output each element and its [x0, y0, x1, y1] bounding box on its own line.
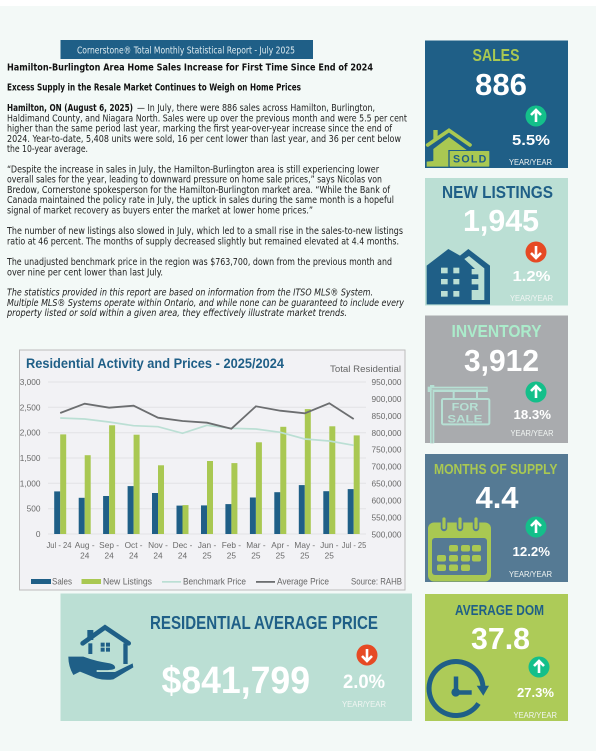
month axis labels: 25	[300, 550, 310, 560]
average price value: $841,799	[162, 660, 310, 702]
icon: up arrow	[528, 656, 550, 678]
legend: Sales	[52, 576, 72, 586]
month axis labels: May -	[294, 540, 315, 550]
year over year label: YEAR/YEAR	[509, 569, 552, 579]
paragraph: spokesperson quote: overall sales for the year, leading to downward pressure on home sale prices,” says Nicolas von	[7, 174, 382, 186]
left axis labels: 2,000	[20, 428, 41, 438]
month axis labels: Feb -	[222, 540, 241, 550]
panel: inventory	[425, 316, 568, 443]
left axis labels: 1,500	[20, 453, 41, 463]
months of supply value: 4.4	[476, 480, 519, 515]
icon: up arrow	[526, 106, 546, 126]
year over year label: YEAR/YEAR	[510, 428, 554, 438]
inventory value: 3,912	[464, 343, 539, 378]
icon: up arrow	[526, 382, 546, 402]
average price line	[60, 403, 354, 429]
right axis labels: 900,000	[372, 394, 402, 404]
sales value: 886	[475, 67, 527, 102]
month axis labels: 24	[104, 550, 114, 560]
right axis labels: 500,000	[372, 529, 402, 539]
month axis labels: 25	[325, 550, 334, 560]
month axis labels: Jul - 24	[46, 540, 72, 550]
panel: new listings	[425, 178, 568, 306]
left axis labels: 1,000	[20, 478, 41, 488]
chart title: Residential Activity and Prices - 2025/2024	[26, 356, 284, 371]
subheading: Excess Supply in the Resale Market Continues to Weigh on Home Prices	[7, 82, 301, 94]
legend	[31, 576, 402, 586]
report banner: Cornerstone® Total Monthly Statistical Report - July 2025	[77, 46, 295, 56]
inventory change: 18.3%	[514, 408, 551, 422]
month axis labels: 24	[178, 550, 187, 560]
legend: New Listings	[103, 576, 152, 586]
new listings value: 1,945	[463, 203, 539, 238]
month axis labels: 25	[251, 550, 261, 560]
average DOM heading: AVERAGE DOM	[455, 603, 544, 619]
month axis labels: 25	[227, 550, 236, 560]
year over year label: YEAR/YEAR	[510, 293, 553, 303]
panel: sales	[425, 40, 568, 168]
month axis labels: Apr -	[271, 540, 290, 550]
icon: sold house: SOLD	[453, 154, 487, 166]
new listings heading: NEW LISTINGS	[442, 182, 553, 202]
paragraph: sales summary: the 10-year average.	[7, 144, 88, 155]
months of supply change: 12.2%	[512, 545, 550, 559]
legend: Average Price	[277, 576, 329, 586]
months of supply heading: MONTHS OF SUPPLY	[434, 462, 558, 478]
left axis labels: 3,000	[20, 377, 41, 387]
right axis labels: 650,000	[372, 479, 402, 489]
month axis labels: 25	[202, 550, 212, 560]
month axis labels: 24	[129, 550, 139, 560]
icon: down arrow	[526, 242, 546, 262]
icon: for sale sign: SALE	[447, 414, 483, 426]
month axis labels	[46, 540, 367, 560]
paragraph: MLS disclaimer: The statistics provided in this report are based on information from the ITSO MLS® System.	[7, 288, 373, 298]
paragraph: spokesperson quote	[7, 164, 394, 216]
right axis labels: 850,000	[372, 411, 402, 421]
right axis labels: 550,000	[372, 512, 402, 522]
legend: Source: RAHB	[351, 576, 402, 586]
new listings bars	[60, 409, 360, 534]
average DOM value: 37.8	[471, 621, 530, 656]
paragraph: benchmark price: over nine per cent lower than last July.	[7, 267, 163, 278]
icon: down arrow	[356, 644, 378, 666]
paragraph: benchmark price: The unadjusted benchmark price in the region was $763,700, down from the previous month and	[6, 257, 392, 268]
sales heading: SALES	[472, 45, 520, 65]
icon: for sale sign	[428, 385, 489, 443]
icon: calendar	[428, 519, 491, 582]
icon: house in hand	[68, 627, 133, 680]
year over year label: YEAR/YEAR	[514, 710, 557, 720]
right axis labels: 600,000	[372, 496, 402, 506]
right axis labels: 700,000	[372, 462, 402, 472]
month axis labels: Sep -	[99, 540, 119, 550]
right axis labels: 750,000	[372, 445, 402, 455]
paragraph: sales summary: Haldimand County, and Niagara North. Sales were up over the previous month and were 5.5 per cent	[7, 113, 407, 124]
left axis labels: 500	[27, 504, 41, 514]
icon: sold house	[427, 130, 490, 167]
month axis labels: Mar -	[246, 540, 266, 550]
average DOM change: 27.3%	[517, 686, 554, 700]
left axis labels: 2,500	[20, 402, 41, 412]
right axis labels: 950,000	[372, 377, 402, 387]
left axis labels	[20, 377, 41, 539]
average price heading: RESIDENTIAL AVERAGE PRICE	[150, 613, 378, 633]
month axis labels: Aug -	[75, 540, 95, 550]
panel: average days on market	[425, 594, 568, 721]
paragraph: MLS disclaimer	[6, 288, 404, 319]
icon: up arrow	[526, 516, 546, 538]
year over year label: YEAR/YEAR	[509, 157, 552, 167]
paragraph: new listings: ratio at 46 percent. The months of supply decreased slightly but remained elevated at 4.4 months.	[7, 236, 399, 247]
month axis labels: 24	[153, 550, 163, 560]
right axis labels	[372, 377, 402, 539]
paragraph: spokesperson quote: “Despite the increase in sales in July, the Hamilton-Burlington area is still experiencing lower	[7, 164, 379, 176]
paragraph: sales summary: higher than the same period last year, marking the first year-over-year increase since the end of	[7, 124, 393, 135]
report banner	[60, 40, 313, 59]
paragraph: MLS disclaimer: property listed or sold within a given area, they effectively illustrate market trends.	[6, 308, 347, 319]
paragraph: sales summary: Hamilton, ON (August 6, 2025)	[7, 103, 133, 114]
left axis labels: 0	[36, 529, 41, 539]
paragraph: sales summary: 2024. Year-to-date, 5,408 units were sold, 16 per cent lower than last year, and 36 per cent below	[7, 134, 401, 145]
paragraph: spokesperson quote: Bredow, Cornerstone spokesperson for the Hamilton-Burlington market area. “While the Bank of	[7, 185, 391, 196]
chart subtitle: Total Residential	[330, 364, 401, 375]
month axis labels: 24	[80, 550, 90, 560]
inventory heading: INVENTORY	[452, 321, 542, 341]
icon: clock with arrow	[429, 662, 489, 716]
chart panel: residential activity and prices	[20, 350, 405, 590]
paragraph: spokesperson quote: signal of market recovery as buyers enter the market at lower home prices.”	[7, 205, 313, 216]
paragraph: sales summary	[7, 103, 407, 155]
icon: apartment building	[427, 249, 490, 304]
icon: for sale sign: FOR	[452, 402, 478, 414]
month axis labels: Oct -	[125, 540, 143, 550]
benchmark price line	[60, 418, 354, 445]
average price change: 2.0%	[343, 672, 385, 693]
paragraph: sales summary: — In July, there were 886 sales across Hamilton, Burlington,	[137, 103, 375, 114]
right axis labels: 800,000	[372, 428, 402, 438]
month axis labels: Dec -	[173, 540, 193, 550]
new listings change: 1.2%	[512, 268, 550, 285]
paragraph: MLS disclaimer: Multiple MLS® Systems operate within Ontario, and while none can be guaranteed to include every	[7, 298, 404, 309]
paragraph: new listings	[6, 226, 403, 247]
sales change: 5.5%	[512, 132, 550, 149]
month axis labels: Jul - 25	[342, 540, 367, 550]
month axis labels: 25	[276, 550, 285, 560]
month axis labels: Jan -	[198, 540, 216, 550]
legend: Benchmark Price	[183, 576, 246, 586]
panel: months of supply	[425, 454, 568, 582]
headline: Hamilton-Burlington Area Home Sales Increase for First Time Since End of 2024	[7, 62, 373, 74]
sales bars	[54, 485, 354, 534]
paragraph: new listings: The number of new listings also slowed in July, which led to a small rise in the sales-to-new listings	[6, 226, 403, 237]
month axis labels: Nov -	[148, 540, 168, 550]
month axis labels: Jun -	[320, 540, 339, 550]
paragraph: benchmark price	[6, 257, 392, 278]
panel: residential average price	[60, 594, 412, 721]
year over year label: YEAR/YEAR	[342, 699, 386, 709]
paragraph: spokesperson quote: Canada maintained the policy rate in July, the uptick in sales during the same month is a hopeful	[7, 195, 394, 206]
